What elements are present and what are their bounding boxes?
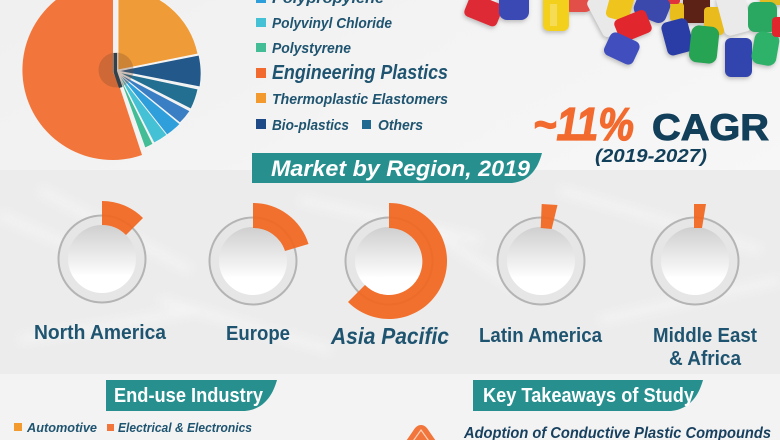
- slice: thermoplastic elastomers: [118, 0, 198, 70]
- CAGR period: (2019-2027): [595, 146, 707, 166]
- label: latin america: Latin America: [479, 325, 603, 347]
- label: north america: North America: [34, 322, 167, 344]
- legend item: polyvinyl chloride: Polyvinyl Chloride: [272, 15, 392, 32]
- banner: end-use industry: End-use Industry: [114, 385, 264, 407]
- legend item: bio-plastics: Bio-plastics: [272, 117, 349, 134]
- slice: engineering plastics: [22, 0, 142, 160]
- legend item: polystyrene: Polystyrene: [272, 40, 351, 57]
- banner: end-use industry: [106, 380, 277, 411]
- slice: polypropylene: [118, 73, 180, 135]
- ring: europe: [210, 203, 308, 304]
- item: automotive: Automotive: [26, 420, 97, 435]
- legend item: engineering plastics: Engineering Plastics: [272, 62, 448, 84]
- slice: polyethylene: [118, 73, 190, 123]
- legend item: others: Others: [378, 117, 423, 134]
- CAGR label: CAGR: [652, 107, 769, 148]
- pie centre edge: [114, 53, 122, 88]
- slice: bio-plastics: [118, 55, 201, 87]
- list: end-use industries: [14, 420, 252, 435]
- label: middle east and africa: Middle East: [653, 325, 757, 347]
- slice: others: [118, 72, 198, 109]
- banner: market by region: Market by Region, 2019: [271, 156, 531, 181]
- label: middle east and africa: & Africa: [669, 348, 742, 370]
- CAGR value: ~11%: [533, 98, 634, 150]
- CAGR callout: [533, 98, 769, 166]
- legend item: thermoplastic elastomers: Thermoplastic Elastomers: [272, 91, 448, 108]
- pie centre shadow: [98, 52, 134, 88]
- banner: key takeaways of study: [473, 380, 703, 411]
- banner: key takeaways of study: Key Takeaways of Study: [483, 385, 695, 407]
- ring: middle east and africa: [652, 204, 738, 304]
- label: europe: Europe: [226, 323, 290, 345]
- legend item: others: [362, 117, 423, 134]
- image: plastic pellets: [463, 0, 780, 77]
- icon: orange warning triangle: [404, 425, 438, 440]
- label: asia pacific: Asia Pacific: [330, 323, 449, 349]
- ring: north america: [58, 201, 146, 302]
- slice: polystyrene: [118, 73, 153, 148]
- ring: asia pacific: [346, 203, 447, 319]
- item: electrical and electronics: Electrical & Electronics: [118, 420, 252, 435]
- pie chart: polymer type share: [22, 0, 201, 160]
- label: middle east and africa: [653, 325, 757, 370]
- legend: polymer types: [256, 0, 448, 134]
- slice: polyvinyl chloride: [118, 73, 167, 143]
- ring: latin america: [498, 204, 584, 304]
